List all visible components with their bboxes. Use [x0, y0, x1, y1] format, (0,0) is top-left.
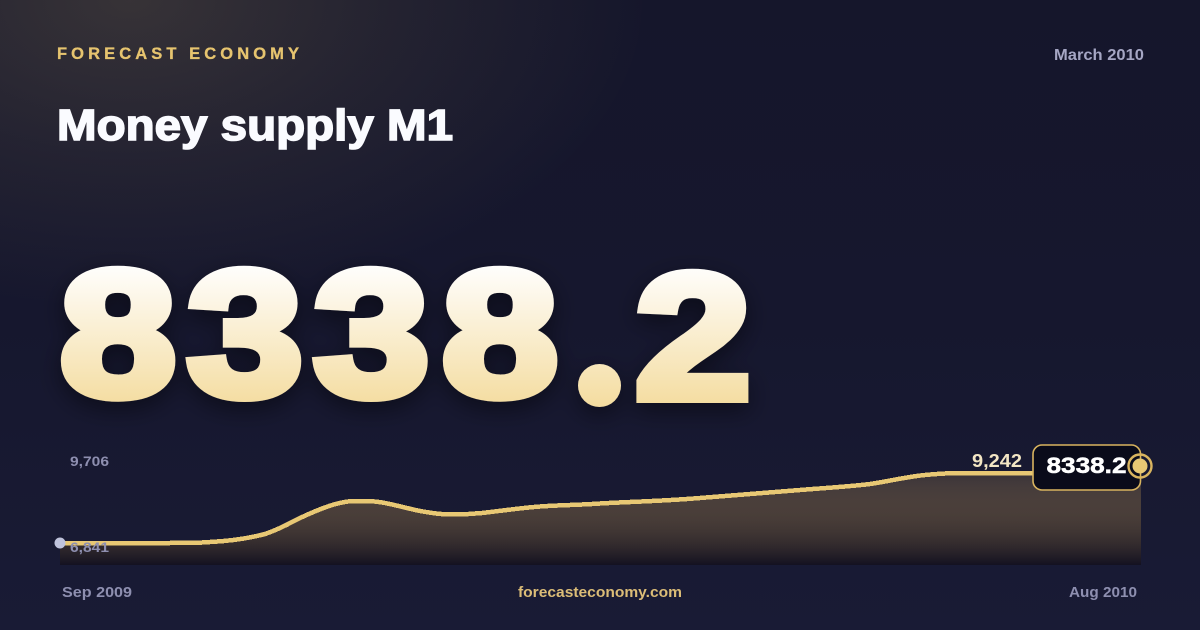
- website footer: forecasteconomy.com: [518, 584, 682, 601]
- area chart: [54, 445, 1152, 565]
- big number: 8338.2: [60, 235, 751, 437]
- chart line: [60, 473, 1035, 543]
- chart area fill: [60, 473, 1141, 565]
- peak value label: 9,242: [972, 451, 1022, 471]
- start date: Sep 2009: [62, 584, 132, 601]
- title: Money supply M1: [57, 101, 453, 150]
- start marker: [54, 538, 66, 548]
- axis max label: 9,706: [70, 453, 109, 469]
- eyebrow: brand name: FORECAST ECONOMY: [57, 45, 299, 63]
- current value badge: [1033, 445, 1140, 490]
- axis min label: 6,841: [70, 539, 109, 555]
- end date: Aug 2010: [1069, 584, 1137, 601]
- end marker: [1128, 454, 1152, 478]
- date label: March 2010: [1054, 47, 1144, 64]
- current value badge: 8338.2: [1046, 453, 1126, 478]
